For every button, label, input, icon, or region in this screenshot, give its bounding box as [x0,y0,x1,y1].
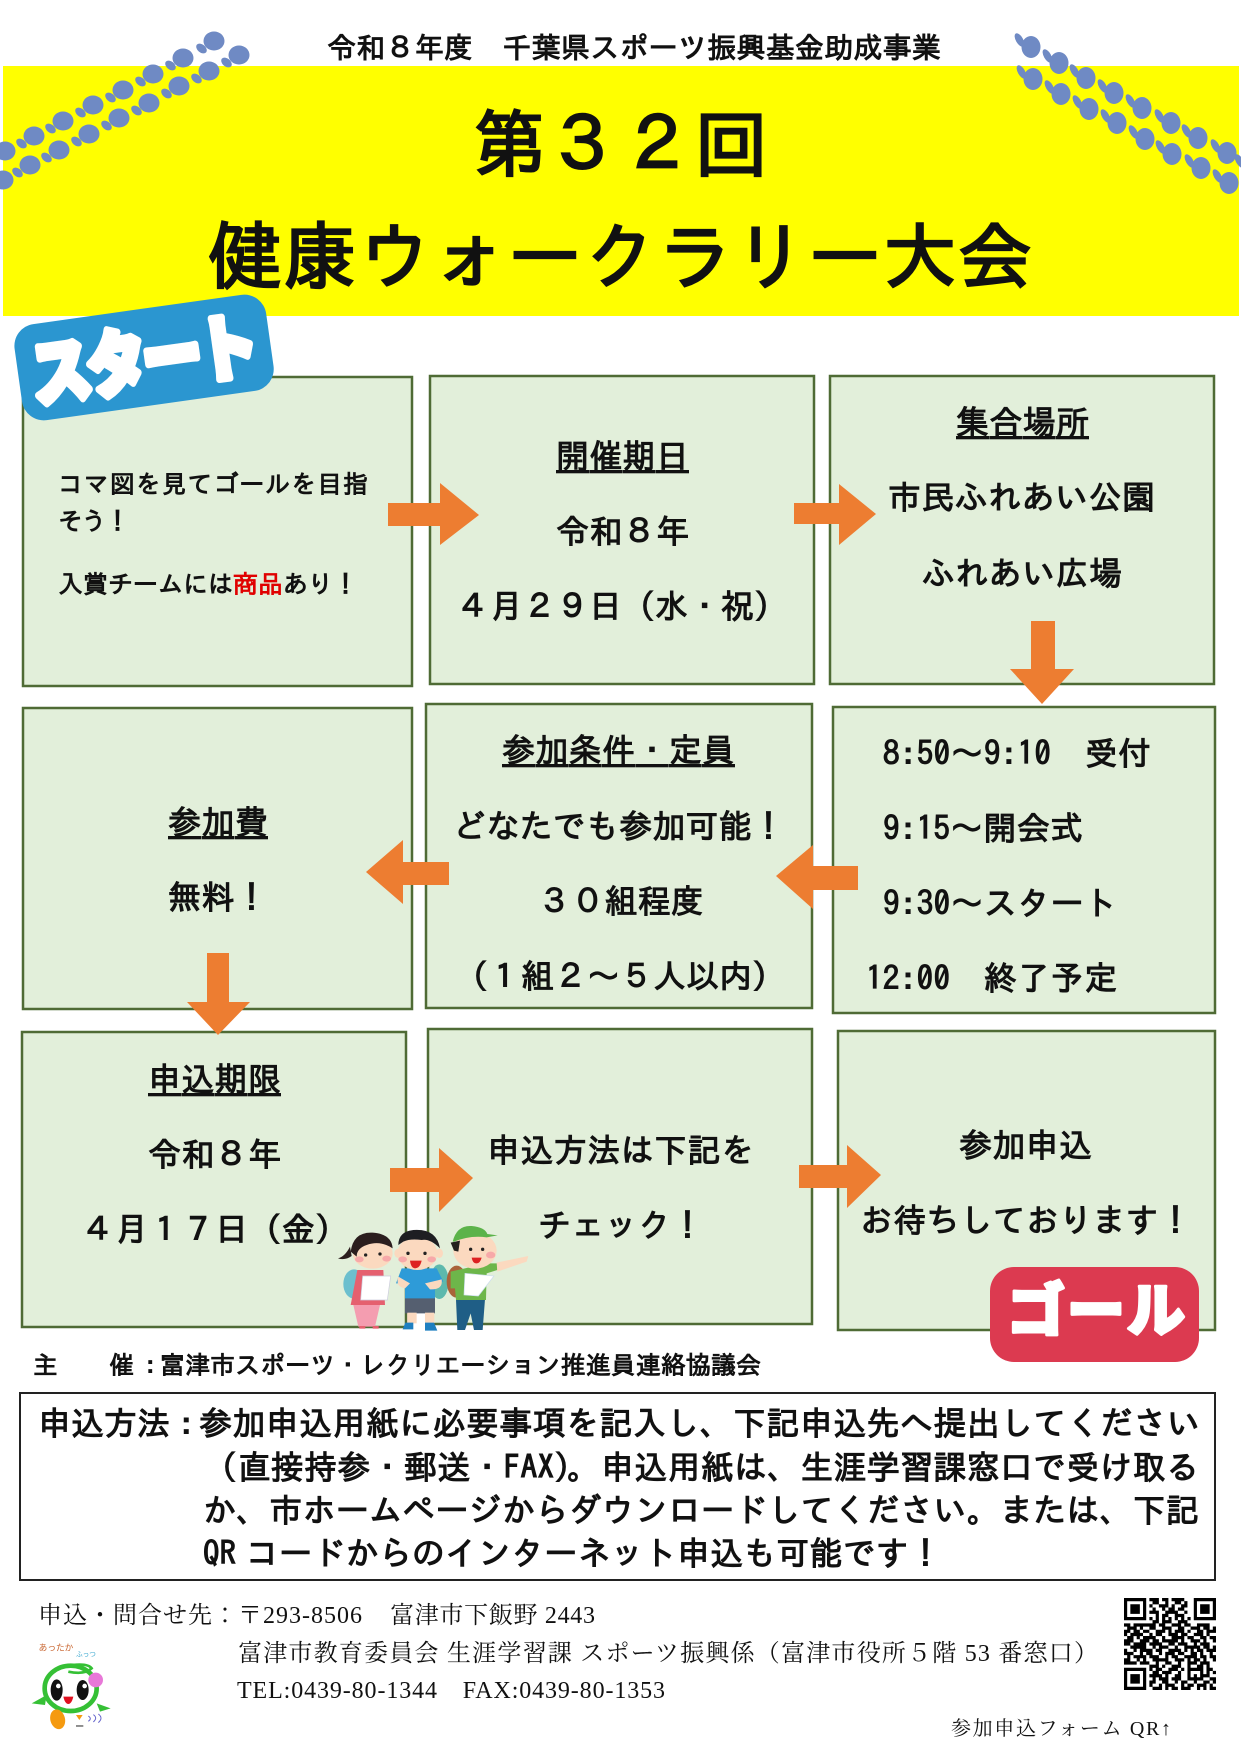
panel: waiting for entries [838,1031,1215,1330]
heading: conditions: 参加条件・定員 [502,733,735,766]
boy with cap [447,1226,528,1330]
text: plaza: ふれあい広場 [922,556,1122,589]
heading: date: 開催期日 [556,439,689,472]
text: entry: 参加申込 [959,1128,1092,1161]
arrow: schedule to conditions [776,845,858,909]
subsidy line: 令和８年度 千葉県スポーツ振興基金助成事業 [327,33,941,62]
text: free: 無料！ [168,880,268,913]
footprints: left [0,32,250,194]
contact details: 申込・問合せ先：〒293-8506 [38,1602,362,1629]
arrow: date to place [794,484,876,545]
icon: mascot logo [32,1642,111,1731]
panel: schedule [833,707,1215,1013]
text: method label: 申込方法 [38,1406,170,1439]
title [208,106,1032,292]
organizer: 催 [109,1352,134,1378]
title: 健康ウォークラリー大会 [208,218,1032,292]
text: era year: 令和８年 [556,514,689,547]
text: check: チェック！ [538,1208,704,1241]
panel: date [430,376,814,684]
icon: mascot logo: あったか [39,1642,74,1654]
arrow: fee to deadline [187,953,250,1035]
panel: participation conditions [426,704,812,1008]
title banner [3,66,1239,316]
icon: mascot logo: ふっつ [76,1649,96,1659]
badge: goal: ゴール [1007,1264,1185,1348]
text: method line 2 [204,1450,1199,1483]
boy [394,1230,449,1331]
text: reception: 8:50～9:10 受付 [883,736,1151,769]
panel: fee [23,708,412,1009]
text: capacity: ３０組程度 [538,884,704,917]
text: method line 4: コードからのインターネット申込も可能です！ [246,1536,942,1569]
girl [338,1233,393,1329]
heading: deadline: 申込期限 [148,1062,281,1095]
illustration: children with map [338,1226,528,1331]
text: check below: 申込方法は下記を [487,1133,754,1166]
text: start time: 9:30～スタート [883,886,1117,919]
heading: fee: 参加費 [168,805,268,838]
text: method line 2: ）。 [554,1450,600,1483]
QR code [1124,1600,1216,1688]
contact details: 富津市下飯野 2443 [390,1602,595,1629]
text: finish: 12:00 終了予定 [866,961,1117,994]
arrow: start to date [388,483,479,545]
title: 第３２回 [472,106,768,180]
QR caption: 参加申込フォーム QR↑ [951,1717,1171,1740]
text: era year: 令和８年 [148,1137,281,1170]
heading: meeting place: 集合場所 [956,405,1089,438]
arrow: deadline to method [390,1148,473,1212]
arrow: conditions to fee [366,840,449,904]
panel: meeting place [830,376,1214,684]
text: park: 市民ふれあい公園 [888,480,1155,513]
footprints: right [1013,32,1241,194]
panel: deadline [22,1032,406,1327]
text: opening: 9:15～開会式 [883,811,1083,844]
text: method line 2: 申込用紙は、生涯学習課窓口で受け取る [601,1450,1199,1483]
text: method line 2: （直接持参・郵送・FAX [204,1450,554,1483]
text: instruction continued: そう！ [58,509,130,534]
text: method line 4: QR [203,1536,236,1569]
text: method line 3: か、市ホームページからダウンロードしてください。または、下記 [203,1493,1199,1526]
text: welcome: お待ちしております！ [860,1203,1192,1236]
arrow: place to schedule [1010,621,1074,704]
text: prizes: 入賞チームには商品あり！ [58,571,358,597]
contact details: TEL:0439-80-1344 FAX:0439-80-1353 [237,1678,665,1704]
text: method colon: : [178,1406,194,1439]
panel: application method [20,1393,1215,1580]
text: group size: （１組２～５人以内） [455,959,785,992]
organizer: 主 [33,1353,58,1378]
panel: start info [23,377,412,686]
text: anyone: どなたでも参加可能！ [453,809,785,842]
text: method line 1: 参加申込用紙に必要事項を記入し、下記申込先へ提出してください [199,1406,1200,1439]
contact details: 富津市教育委員会 生涯学習課 スポーツ振興係（富津市役所５階 53 番窓口） [238,1640,1098,1667]
organizer: : [144,1353,156,1378]
text: instruction: コマ図を見てゴールを目指 [58,471,368,497]
text: deadline date: ４月１７日（金） [82,1212,348,1245]
panel: how to apply pointer [428,1029,812,1324]
text: date: ４月２９日（水・祝） [457,589,787,622]
arrow: method to entry [799,1145,881,1208]
organizer: 富津市スポーツ・レクリエーション推進員連絡協議会 [160,1352,761,1378]
contact details [38,1602,1098,1704]
badge: start: スタート [24,288,264,423]
